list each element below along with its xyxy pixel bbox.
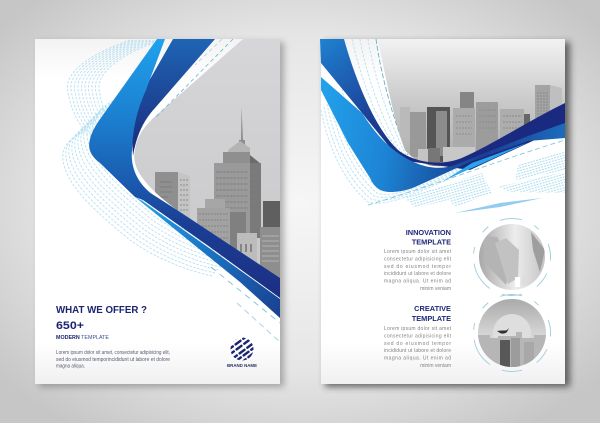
right dark blue band xyxy=(320,39,565,170)
stat: 650+: 650+ xyxy=(56,320,84,332)
text block: innovation: sed do eiusmod tempor xyxy=(384,264,451,270)
body text: magna aliqua. xyxy=(56,364,85,370)
text block: creative xyxy=(384,304,452,369)
icon: brand logo xyxy=(230,338,254,360)
body text: Lorem ipsum dolor sit amet, consectetur adipisicing elit, xyxy=(56,350,170,356)
right main blue band xyxy=(321,77,565,192)
text block: innovation: INNOVATION xyxy=(406,228,451,237)
text block: innovation xyxy=(384,228,452,292)
text block: creative: TEMPLATE xyxy=(412,314,451,323)
text block: innovation: magna aliqua. Ut enim ad xyxy=(384,278,451,284)
left page dashed wave pattern xyxy=(63,40,280,342)
body text: sed do eiusmod temporincididunt ut labore et dolore xyxy=(56,357,170,363)
left lower light stripe xyxy=(135,197,280,318)
text block: creative: sed do eiusmod tempor xyxy=(384,341,451,347)
skyline towers xyxy=(400,85,562,166)
photo and ring: creative xyxy=(474,294,551,372)
text block: innovation: incididunt ut labore et dolore xyxy=(384,271,451,277)
right light blue stripe xyxy=(445,142,528,180)
building: left block xyxy=(155,172,190,222)
panel: left page xyxy=(35,39,284,387)
text block: creative: minim veniam xyxy=(420,363,451,369)
text block: innovation: Lorem ipsum dolor sit amet xyxy=(384,249,452,255)
text block: creative: magna aliqua. Ut enim ad xyxy=(384,356,451,362)
body text xyxy=(56,350,170,370)
text block: creative: CREATIVE xyxy=(414,304,451,313)
right dotted textures xyxy=(405,150,565,213)
text block: innovation: minim veniam xyxy=(420,286,451,292)
right cityscape photo xyxy=(380,47,565,166)
brand name: BRAND NAME xyxy=(227,363,257,368)
text block: creative: Lorem ipsum dolor sit amet xyxy=(384,326,452,332)
photo and ring: innovation xyxy=(474,218,551,296)
left cityscape photo xyxy=(130,39,280,284)
text block: creative: incididunt ut labore et dolore xyxy=(384,348,451,354)
left dark blue band xyxy=(132,39,215,156)
text block: creative: consectetur adipisicing elit xyxy=(384,334,452,340)
subheading: MODERN TEMPLATE xyxy=(56,335,110,341)
right dashed patterns xyxy=(321,39,565,205)
white dashed strip xyxy=(155,39,233,118)
heading: WHAT WE OFFER ? xyxy=(56,305,147,316)
building: front blocks xyxy=(197,199,280,279)
panel: right page xyxy=(320,39,570,387)
left main blue band xyxy=(89,39,280,298)
text block: innovation: TEMPLATE xyxy=(412,238,451,246)
building: main tower xyxy=(214,107,261,238)
text block: innovation: consectetur adipisicing elit xyxy=(384,256,452,262)
